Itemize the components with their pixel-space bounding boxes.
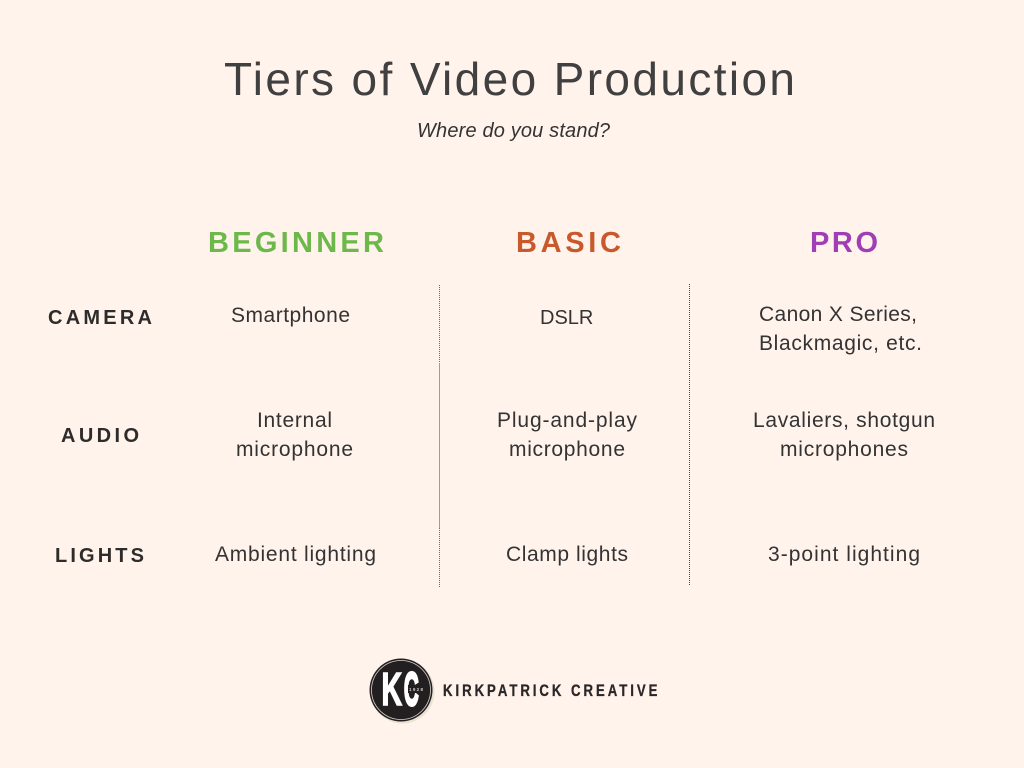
divider left xyxy=(438,285,440,587)
basic audio: Plug-and-play xyxy=(497,409,638,432)
pro audio: microphones xyxy=(780,438,908,461)
subtitle: Where do you stand? xyxy=(417,120,611,142)
title: Tiers of Video Production xyxy=(224,53,795,105)
logo badge xyxy=(370,658,434,724)
beginner audio xyxy=(236,409,353,461)
column heading: basic: BASIC xyxy=(516,227,621,259)
column heading: beginner: BEGINNER xyxy=(208,227,384,259)
column heading: pro: PRO xyxy=(810,227,878,259)
pro camera: Canon X Series, xyxy=(759,303,917,326)
pro camera xyxy=(759,303,922,355)
basic audio: microphone xyxy=(509,438,625,461)
row label: camera: CAMERA xyxy=(48,307,152,329)
beginner camera: Smartphone xyxy=(231,304,350,327)
basic audio xyxy=(497,409,638,461)
pro camera: Blackmagic, etc. xyxy=(759,332,922,355)
divider right xyxy=(688,284,690,585)
row label: audio: AUDIO xyxy=(61,425,139,447)
logo xyxy=(370,658,657,724)
logo badge: 1928 xyxy=(409,687,423,692)
logo wordmark: KIRKPATRICK CREATIVE xyxy=(443,682,657,700)
beginner audio: microphone xyxy=(236,438,353,461)
logo badge: C xyxy=(404,664,419,715)
basic lights: Clamp lights xyxy=(506,543,628,566)
basic camera: DSLR xyxy=(540,307,593,329)
beginner lights: Ambient lighting xyxy=(215,543,376,566)
logo badge: K xyxy=(382,664,402,716)
pro audio: Lavaliers, shotgun xyxy=(753,409,935,432)
pro lights: 3-point lighting xyxy=(768,543,920,566)
row label: lights: LIGHTS xyxy=(55,545,144,567)
beginner audio: Internal xyxy=(257,409,332,432)
pro audio xyxy=(753,409,935,461)
